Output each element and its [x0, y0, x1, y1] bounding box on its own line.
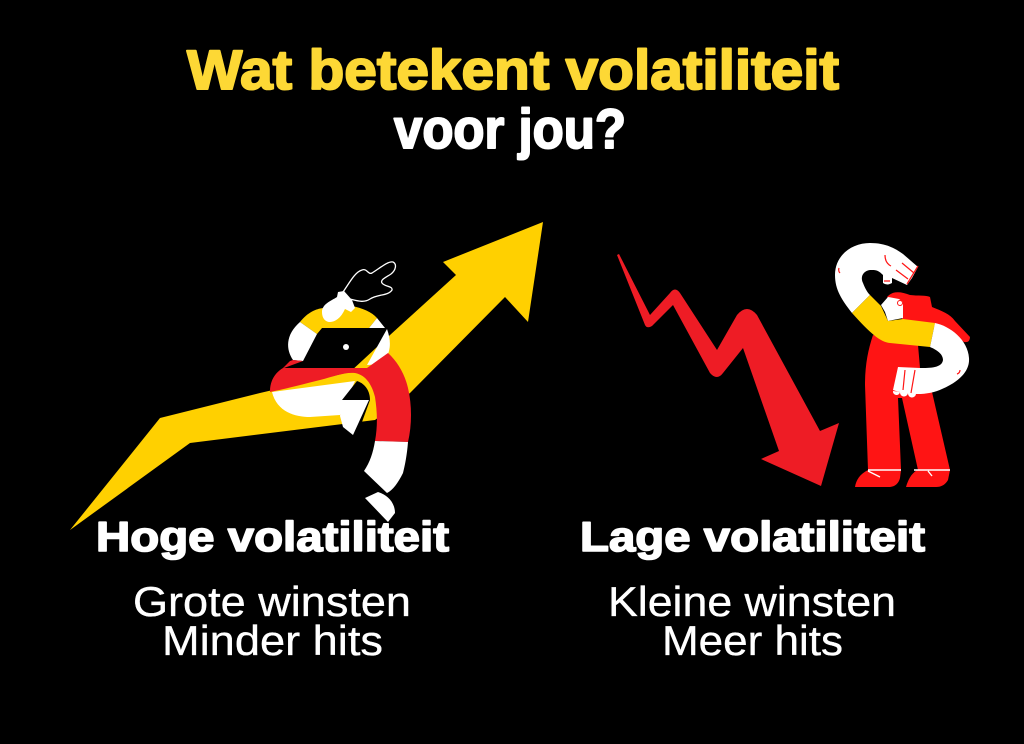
shoulder sweater: [300, 306, 377, 334]
text: lage details: [608, 578, 896, 664]
heading: hoge volatiliteit: Hoge volatiliteit: [96, 513, 449, 560]
shoe: [365, 492, 395, 522]
text: hoge details: Minder hits: [162, 617, 383, 664]
left arm: [288, 322, 317, 361]
heading: lage volatiliteit: Lage volatiliteit: [580, 513, 925, 560]
shoe left: [855, 470, 901, 487]
face: [881, 297, 903, 321]
right arm: [367, 318, 390, 365]
icon: falling red arrow: [617, 254, 839, 486]
black hand wedge: [342, 381, 370, 436]
title: [187, 38, 839, 160]
white hand: [340, 400, 369, 435]
title: Wat betekent volatiliteit: [187, 38, 839, 101]
text: hoge details: [133, 578, 411, 664]
text: hoge details: Grote winsten: [133, 578, 411, 625]
head: [322, 291, 355, 322]
upper white arm: [835, 243, 918, 313]
finger bumps: [893, 391, 916, 398]
text: lage details: Meer hits: [662, 617, 843, 664]
hair: [887, 292, 970, 342]
lower white arm: [893, 323, 969, 394]
icon: rising yellow arrow: [70, 222, 543, 530]
illustration: person with laptop on the arrow: [270, 262, 411, 522]
body and legs: [865, 335, 950, 470]
white thigh: [272, 381, 355, 417]
arm details: [839, 255, 918, 284]
title: voor jou?: [394, 97, 626, 160]
hair outline: [343, 262, 395, 301]
lower leg: [364, 441, 408, 493]
red sweater and leg: [270, 353, 411, 442]
shoe right: [906, 470, 950, 487]
hand details: [903, 370, 960, 393]
shoe laces: [868, 470, 950, 477]
yellow sleeve: [852, 295, 935, 347]
laptop dot: [343, 344, 349, 350]
ear: [898, 300, 902, 306]
text: lage details: Kleine winsten: [608, 578, 896, 625]
illustration: person with red hair: [835, 243, 970, 487]
